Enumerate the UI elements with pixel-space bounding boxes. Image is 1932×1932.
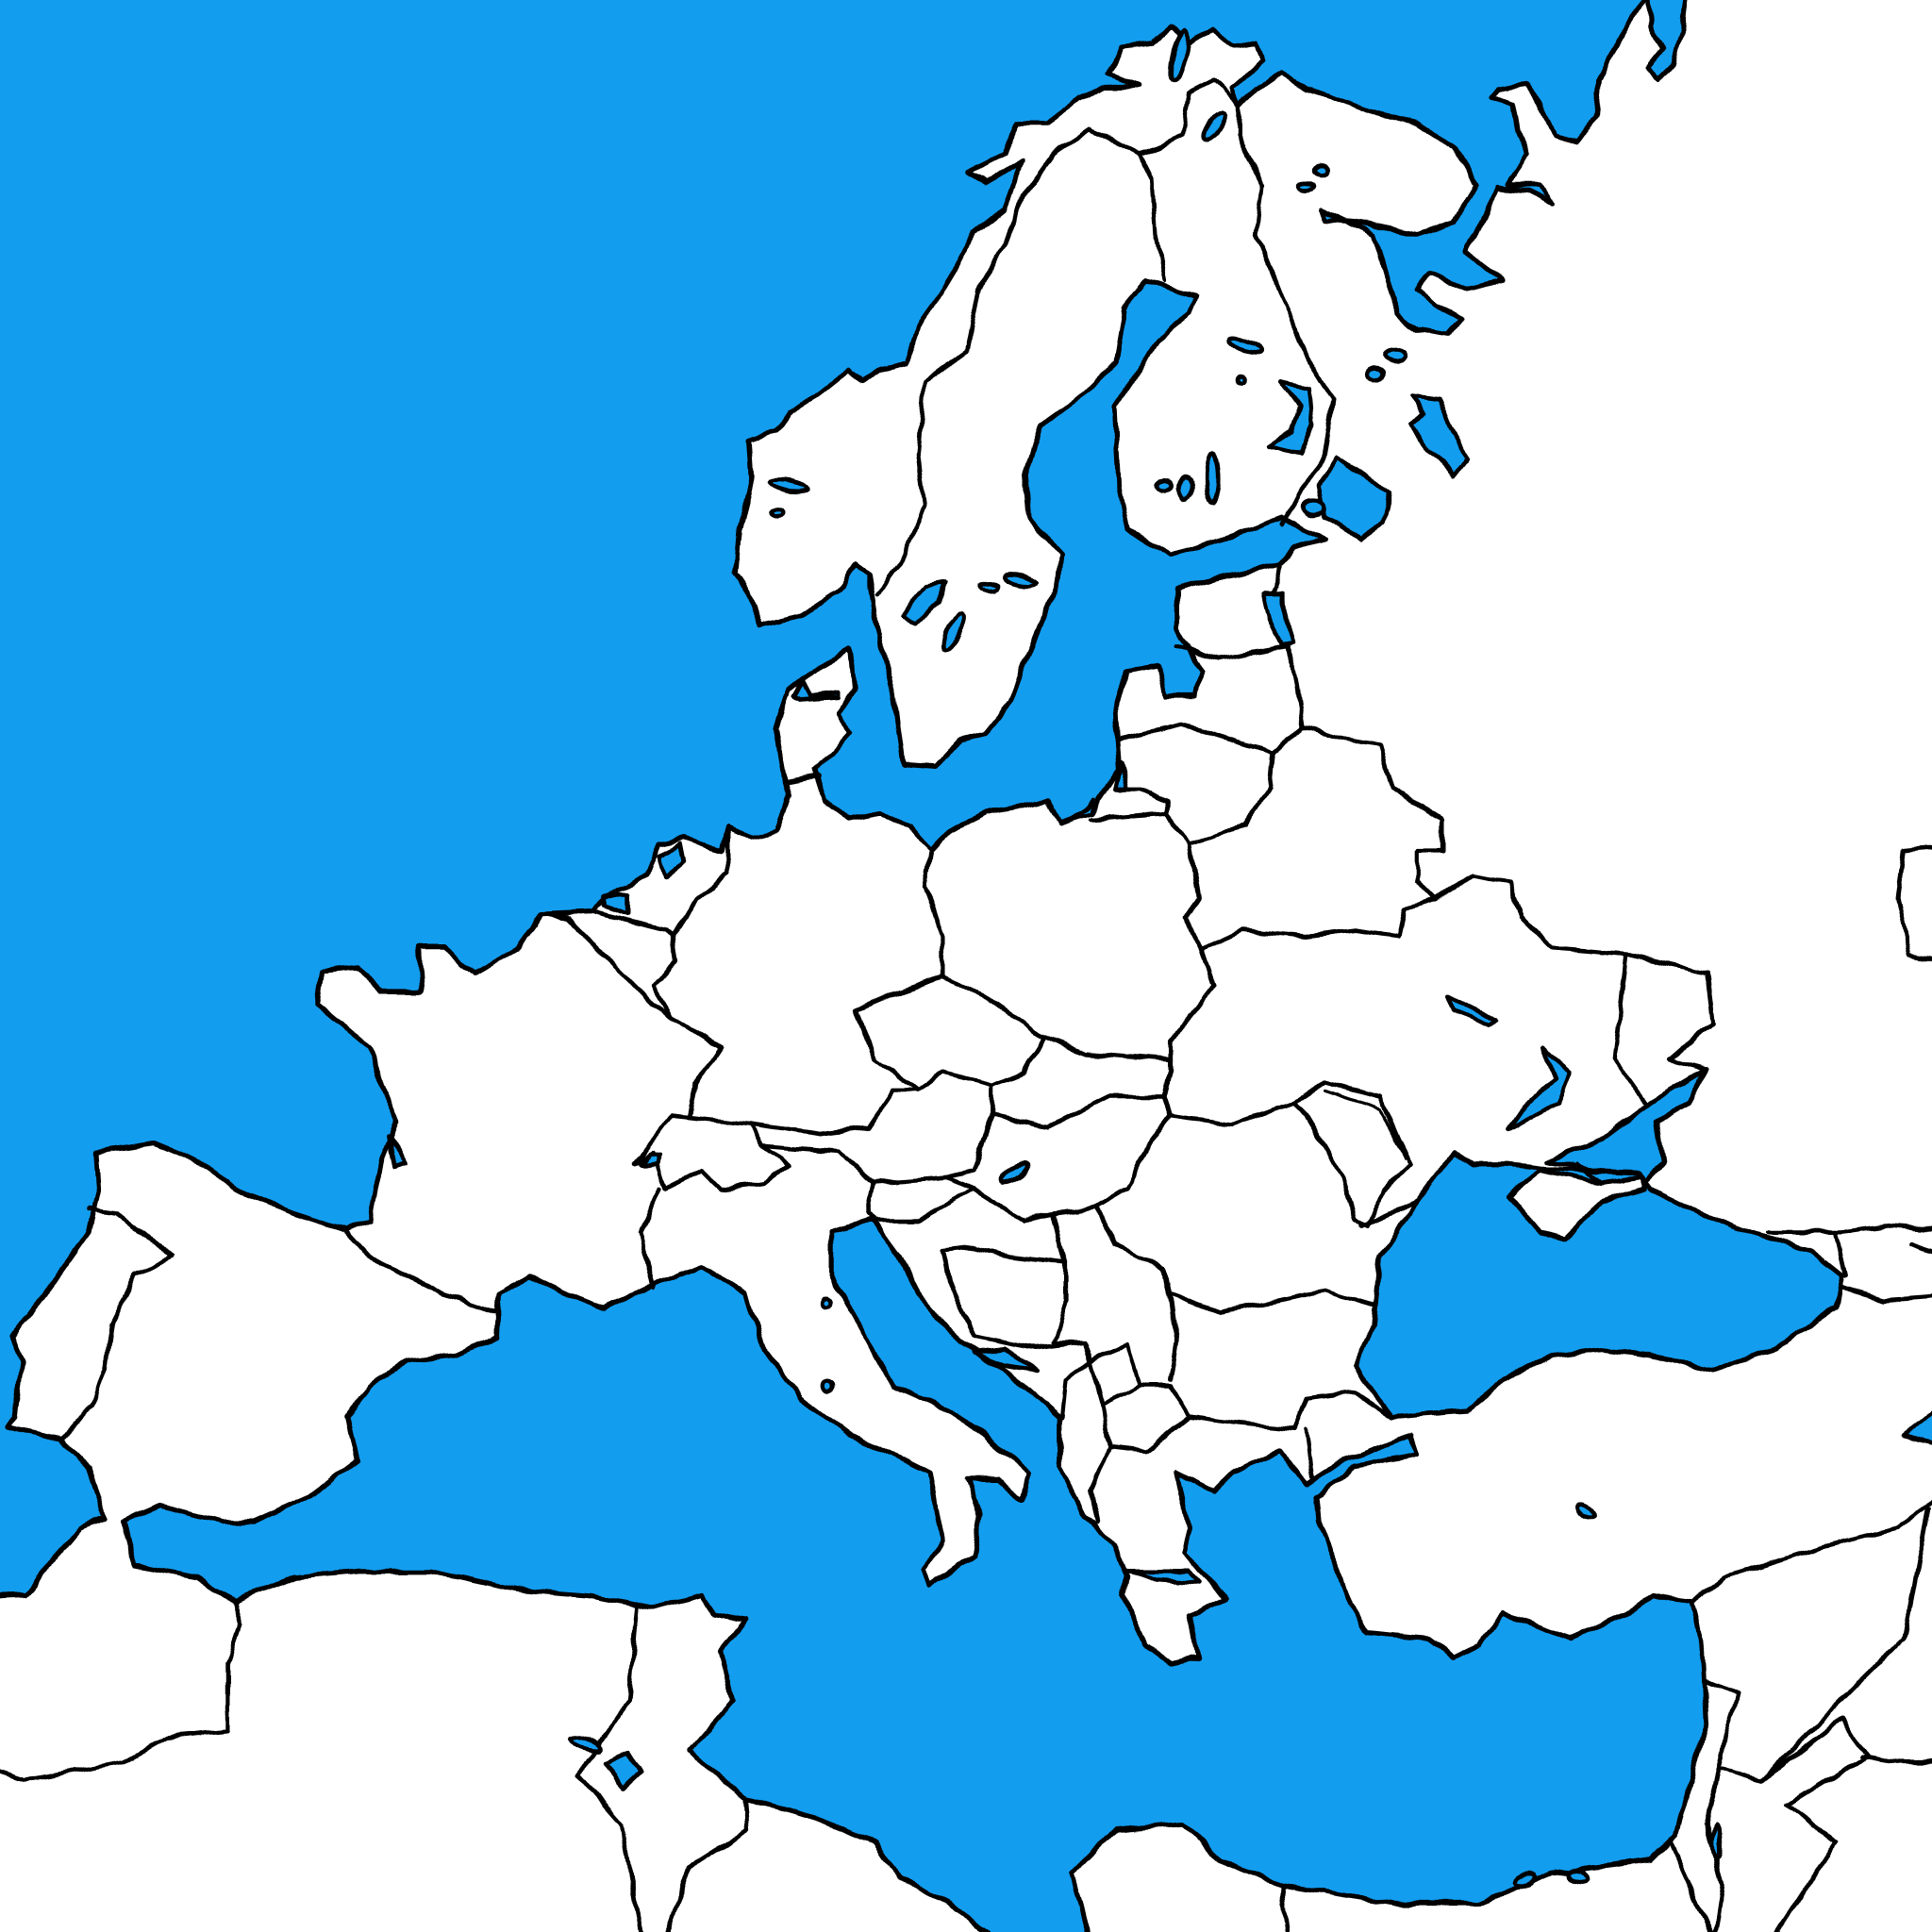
sea: Azov xyxy=(1546,1070,1707,1183)
peninsula: Crimea xyxy=(1509,1171,1645,1239)
sea: Atlantic, North Sea, Baltic, Arctic xyxy=(0,0,1686,1598)
lakes and inland water xyxy=(388,30,1932,1889)
sea: Black Sea xyxy=(1356,1152,1842,1417)
sea: Mediterranean xyxy=(124,1220,1707,1932)
